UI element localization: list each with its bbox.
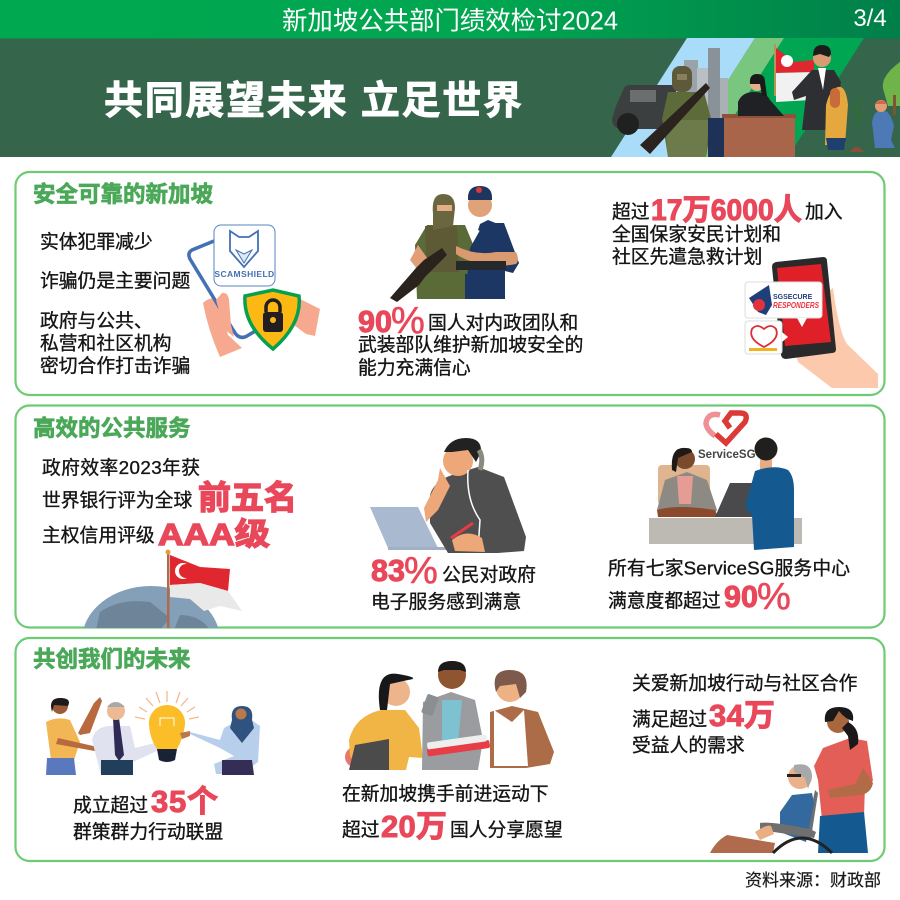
text: crime points [40,231,190,376]
text: crime points: 政府与公共、 [40,310,153,331]
icon: hand holding phone with responder apps [745,257,878,388]
stat: ServiceSG satisfaction: 所有七家ServiceSG服务中心 [608,558,850,578]
stat: 90 percent confidence [358,300,583,378]
stat: 83 percent e-services [371,550,536,612]
heading: 共创我们的未来 [33,647,191,672]
stat: 83 percent e-services: 公民对政府 [442,564,536,585]
text: crime points: 诈骗仍是主要问题 [40,270,190,291]
text: government ranking: AAA级 [158,517,270,552]
top header bar [0,0,900,38]
heading: 安全可靠的新加坡 [33,182,214,207]
page number: 3/4 [853,5,887,32]
stat: 35 alliances: 35个 [151,784,218,819]
heading: 高效的公共服务 [33,416,191,441]
stat: 176000 responders: 全国保家安民计划和 [612,224,781,244]
text: government ranking [42,457,297,552]
icon: ScamShield phone and hands: SCAMSHIELD [214,269,275,279]
stat: 83 percent e-services: 电子服务感到满意 [371,591,521,612]
text: government ranking: 主权信用评级 [42,524,155,546]
stat: ServiceSG satisfaction [608,558,850,618]
icon: caregiver with wheelchair user [710,707,873,853]
icon: team around light bulb [46,691,260,775]
panel: efficient public service [14,404,886,629]
stat: 90 percent confidence: 武装部队维护新加坡安全的 [358,334,583,355]
stat: 35 alliances: 成立超过 [73,794,148,816]
header title: 新加坡公共部门绩效检讨2024 [282,8,618,36]
stat: 340000 beneficiaries [632,672,858,756]
stat: 340000 beneficiaries: 受益人的需求 [632,734,745,756]
stat: 176000 responders [612,194,843,267]
icon: ScamShield phone and hands [189,225,320,357]
icon: globe with Singapore flag [84,550,242,628]
icon: soldier and police officer [390,186,519,302]
icon: hand holding phone with responder apps: SGSECURE [773,294,813,301]
stat: ServiceSG satisfaction: 90 [724,580,758,614]
stat: 340000 beneficiaries: 34万 [709,698,775,733]
stat: 90 percent confidence: 90 [358,305,392,339]
stat: 340000 beneficiaries: 满足超过 [632,708,707,730]
stat: ServiceSG satisfaction: % [757,576,791,618]
stat: 90 percent confidence: 能力充满信心 [358,357,471,378]
stat: 200000 shared aspirations: 国人分享愿望 [450,819,563,840]
text: crime points: 密切合作打击诈骗 [40,355,190,376]
stat: 90 percent confidence: % [391,300,425,342]
stat: 90 percent confidence: 国人对内政团队和 [428,312,578,333]
stat: 200000 shared aspirations: 20万 [381,809,447,844]
stat: 176000 responders: 加入 [805,201,843,222]
stat: 176000 responders: 17万6000人 [651,194,802,227]
stat: 83 percent e-services: % [404,550,438,592]
icon: man on phone with laptop [370,438,526,553]
banner illustration [611,38,900,157]
text: crime points: 私营和社区机构 [40,332,171,354]
icon: ServiceSG logo and counter: ServiceSG [698,449,756,461]
stat: 200000 shared aspirations: 在新加坡携手前进运动下 [342,783,549,804]
icon: three people sharing views [345,661,554,770]
stat: 340000 beneficiaries: 关爱新加坡行动与社区合作 [632,672,858,694]
title banner [0,38,900,157]
stat: 200000 shared aspirations [342,783,563,844]
source note: 资料来源：财政部 [745,871,881,890]
panel: building our future [16,638,884,861]
text: government ranking: 世界银行评为全球 [42,490,192,510]
panel: secure Singapore [16,172,884,395]
stat: 35 alliances: 群策群力行动联盟 [73,821,223,842]
stat: 176000 responders: 社区先遣急救计划 [612,246,762,267]
text: crime points: 实体犯罪减少 [40,231,153,252]
stat: 176000 responders: 超过 [612,201,650,222]
stat: 83 percent e-services: 83 [371,554,405,588]
stat: 200000 shared aspirations: 超过 [342,819,380,840]
icon: hand holding phone with responder apps: RESPONDERS [773,301,820,310]
stat: ServiceSG satisfaction: 满意度都超过 [608,590,721,611]
main title: 共同展望未来 立足世界 [104,80,522,123]
stat: 35 alliances [73,784,223,842]
icon: ServiceSG logo and counter [649,413,802,550]
text: government ranking: 政府效率2023年获 [42,457,200,478]
text: government ranking: 前五名 [198,479,297,516]
